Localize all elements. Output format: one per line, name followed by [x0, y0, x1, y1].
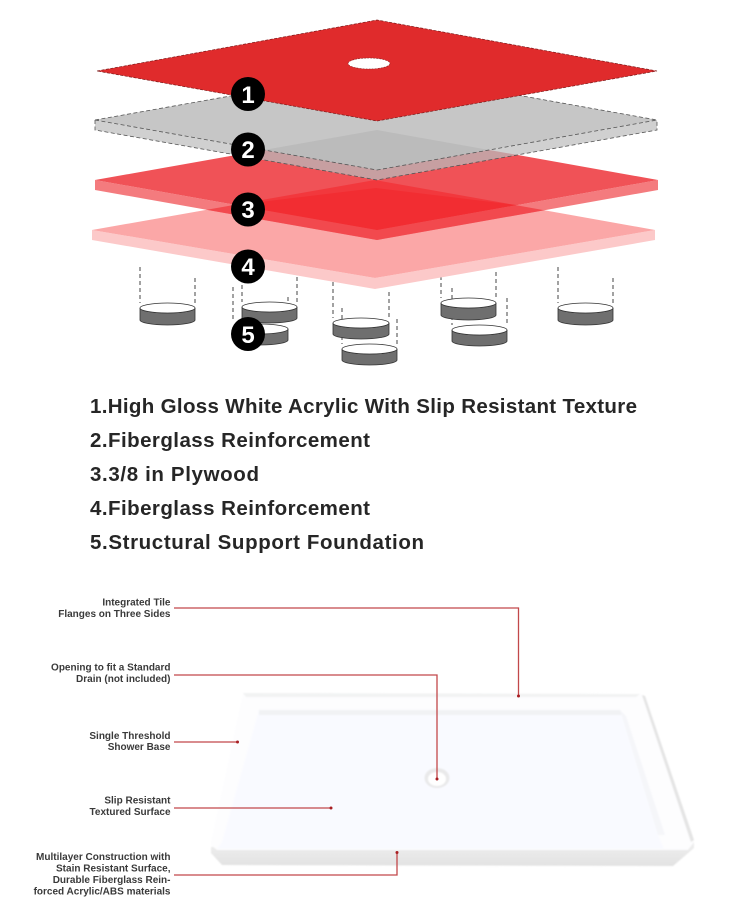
label: textured surface: Slip Resistant — [104, 796, 171, 806]
badge 2 — [231, 132, 265, 166]
badge 1: 1 — [241, 82, 255, 109]
foot 2 — [242, 277, 297, 323]
foot 8 — [558, 267, 613, 325]
badge 3 — [231, 192, 265, 226]
tray floor — [217, 710, 664, 849]
label: drain: Opening to fit a Standard — [51, 662, 170, 674]
item 1: 1.High Gloss White Acrylic With Slip Resistant Texture — [90, 395, 637, 418]
drain opening — [424, 768, 450, 788]
item 3: 3.3/8 in Plywood — [90, 463, 259, 486]
label: threshold: Single Threshold — [89, 731, 170, 742]
drain hole — [348, 58, 390, 69]
badge 3: 3 — [241, 197, 255, 224]
top flange shadow — [243, 693, 640, 697]
badge 4 — [231, 250, 265, 284]
foot 5 — [342, 308, 397, 365]
foot 7 — [452, 288, 507, 346]
callout line: multilayer — [174, 851, 398, 875]
callout line: textured surface — [174, 806, 332, 810]
badge 5: 5 — [241, 322, 255, 349]
label: flanges: Flanges on Three Sides — [58, 609, 171, 620]
number badges — [231, 77, 265, 351]
callout labels — [34, 598, 171, 898]
foot 6 — [441, 262, 496, 320]
label: threshold: Shower Base — [108, 742, 171, 753]
label: textured surface — [90, 796, 171, 818]
recess shadow right — [620, 710, 665, 835]
badge 1 — [231, 77, 265, 111]
right flange shadow — [642, 695, 694, 842]
front face — [211, 842, 694, 866]
layer 2: fiberglass — [94, 96, 658, 180]
item 2: 2.Fiberglass Reinforcement — [90, 429, 370, 452]
layer 4: fiberglass — [92, 180, 655, 289]
label: multilayer: forced Acrylic/ABS materials — [34, 886, 171, 898]
label: multilayer: Multilayer Construction with — [36, 852, 170, 863]
label: threshold — [89, 731, 171, 753]
shower base product — [211, 693, 694, 866]
label: drain: Drain (not included) — [76, 674, 170, 685]
callout line: threshold — [174, 740, 239, 744]
recess shadow top — [259, 710, 623, 715]
item 5: 5.Structural Support Foundation — [90, 531, 424, 554]
badge 2: 2 — [241, 137, 255, 164]
callout line: drain — [174, 675, 438, 780]
tray rim — [211, 693, 694, 850]
badge 5 — [231, 317, 265, 351]
label: textured surface: Textured Surface — [90, 807, 171, 818]
label: flanges: Integrated Tile — [102, 598, 171, 608]
callout lines — [174, 608, 520, 875]
label: multilayer — [34, 852, 171, 898]
support feet — [140, 262, 613, 365]
layer 1: acrylic — [97, 20, 657, 121]
badge 4: 4 — [241, 254, 255, 281]
layer 3: plywood — [95, 150, 658, 240]
label: multilayer: Stain Resistant Surface, — [56, 864, 171, 874]
foot 3 — [233, 287, 288, 345]
label: flanges — [58, 598, 171, 620]
label: multilayer: Durable Fiberglass Rein- — [53, 875, 170, 886]
exploded layer diagram — [92, 20, 658, 365]
label: drain — [51, 662, 170, 685]
foot 1 — [140, 267, 195, 325]
foot 4 — [333, 282, 389, 339]
callout line: flanges — [174, 608, 520, 698]
layer list — [90, 395, 637, 554]
item 4: 4.Fiberglass Reinforcement — [90, 497, 370, 520]
